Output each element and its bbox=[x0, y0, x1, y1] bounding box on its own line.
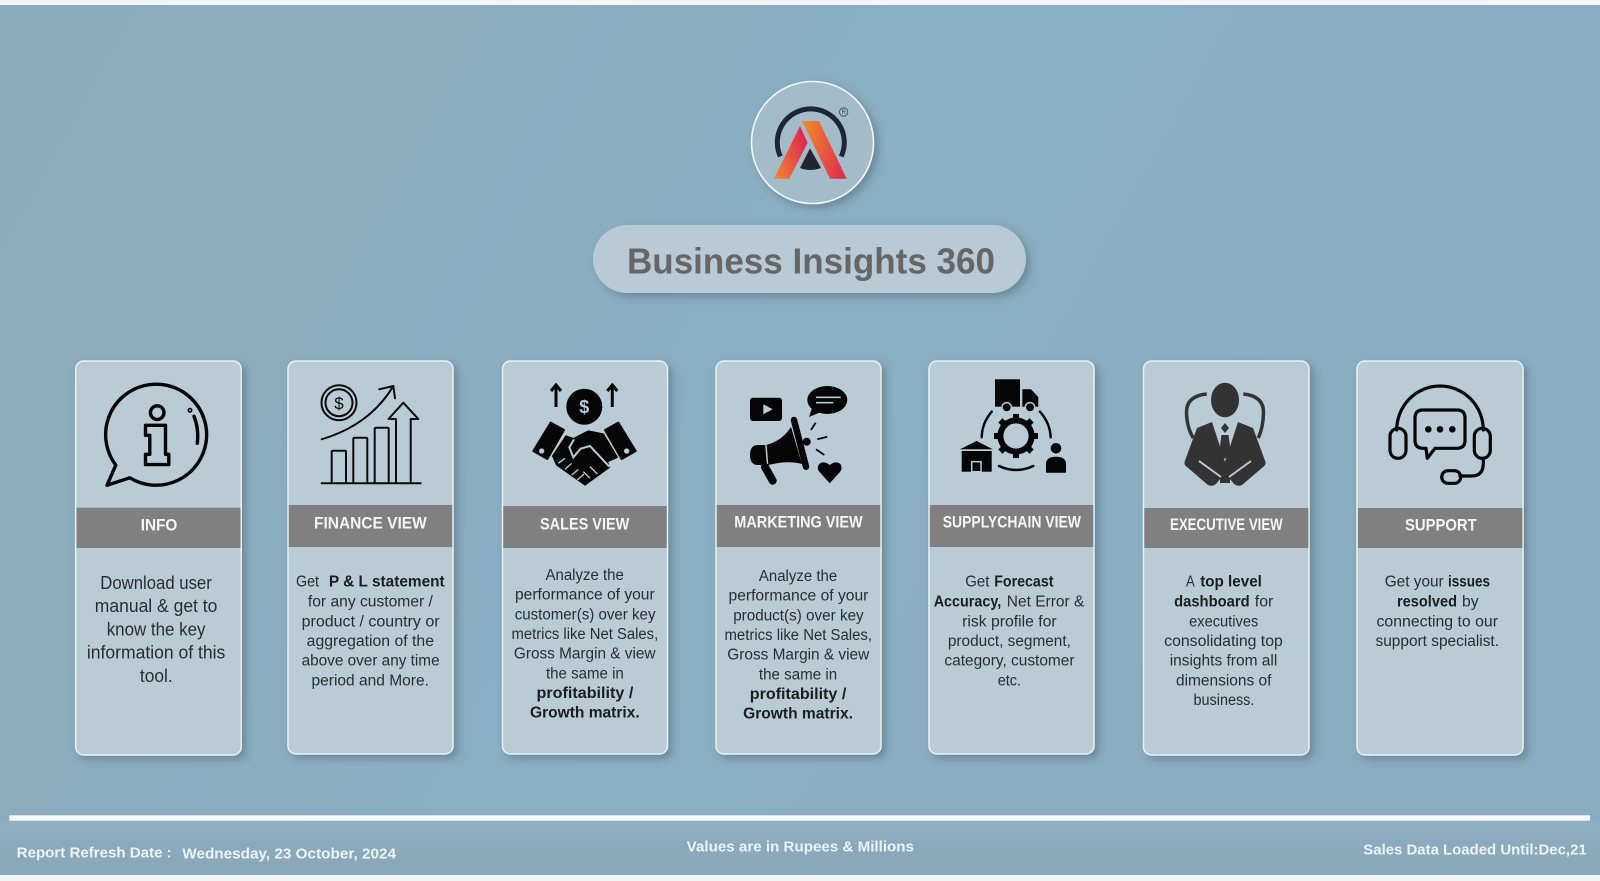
text: sales description: Gross Margin & view bbox=[514, 646, 656, 663]
heading: marketing view: MARKETING VIEW bbox=[734, 513, 863, 531]
text: sales description: Analyze the bbox=[546, 567, 624, 584]
text: executive description bbox=[1164, 574, 1283, 709]
title pill: Business Insights 360 bbox=[627, 240, 995, 282]
text: support description bbox=[1376, 574, 1499, 650]
logo badge bbox=[752, 82, 874, 204]
text: executive description: business. bbox=[1194, 692, 1254, 709]
text: marketing description bbox=[724, 568, 872, 723]
text: supplychain description: Forecast bbox=[994, 574, 1054, 591]
heading: info bbox=[76, 508, 240, 548]
heading: finance view bbox=[289, 505, 452, 547]
footer: units note: Values are in Rupees & Millions bbox=[687, 839, 914, 856]
text: executive description: executives bbox=[1189, 613, 1259, 630]
footer: report refresh date label: Report Refresh Date : bbox=[17, 844, 172, 861]
heading: support: SUPPORT bbox=[1405, 517, 1477, 535]
panel: info bbox=[76, 361, 241, 755]
text: sales description: the same in bbox=[546, 665, 624, 682]
text: supplychain description: product, segment, bbox=[948, 633, 1071, 650]
text: executive description: A bbox=[1186, 574, 1195, 591]
text: support description: resolved bbox=[1397, 594, 1457, 610]
text: supplychain description bbox=[934, 574, 1085, 689]
heading: executive view bbox=[1144, 508, 1308, 548]
text: finance description: for any customer / bbox=[308, 594, 434, 610]
text: marketing description: Analyze the bbox=[759, 568, 837, 585]
text: info description: tool. bbox=[140, 666, 173, 686]
text: sales description: Growth matrix. bbox=[530, 705, 640, 722]
heading: marketing view bbox=[717, 505, 880, 547]
icon: finance growth chart bbox=[322, 385, 421, 483]
text: sales description: metrics like Net Sales, bbox=[512, 626, 658, 643]
heading: sales view: SALES VIEW bbox=[540, 515, 630, 533]
heading: executive view: EXECUTIVE VIEW bbox=[1170, 516, 1283, 534]
icon: info speech bubble bbox=[106, 384, 207, 485]
text: sales description bbox=[512, 567, 658, 722]
icon: finance growth chart: $ bbox=[334, 394, 344, 413]
text: finance description: P & L statement bbox=[329, 574, 445, 591]
panel: finance view bbox=[288, 361, 453, 754]
text: support description: issues bbox=[1448, 574, 1490, 591]
icon: marketing megaphone bbox=[750, 386, 847, 483]
heading: info: INFO bbox=[141, 517, 177, 535]
text: marketing description: Growth matrix. bbox=[743, 706, 853, 723]
text: support description: by bbox=[1462, 594, 1479, 610]
text: info description: manual & get to bbox=[95, 596, 217, 616]
text: finance description bbox=[296, 574, 445, 689]
text: marketing description: performance of your bbox=[728, 588, 868, 605]
text: supplychain description: Accuracy, bbox=[934, 594, 1001, 610]
text: info description: Download user bbox=[100, 573, 212, 593]
text: info description: know the key bbox=[107, 620, 206, 640]
text: supplychain description: Net Error & bbox=[1007, 594, 1085, 610]
icon: sales handshake with coin bbox=[533, 385, 636, 485]
text: support description: Get your bbox=[1385, 574, 1444, 591]
text: finance description: above over any time bbox=[302, 653, 440, 670]
icon: sales handshake with coin: $ bbox=[579, 397, 589, 417]
text: support description: connecting to our bbox=[1376, 613, 1498, 630]
text: finance description: aggregation of the bbox=[307, 633, 434, 650]
panel: support bbox=[1357, 361, 1523, 755]
text: marketing description: the same in bbox=[759, 666, 837, 683]
text: finance description: product / country or bbox=[302, 613, 440, 630]
text: executive description: consolidating top bbox=[1164, 633, 1283, 650]
text: info description bbox=[87, 573, 225, 686]
text: finance description: Get bbox=[296, 574, 320, 591]
text: marketing description: profitability / bbox=[750, 686, 847, 703]
heading: sales view bbox=[503, 506, 667, 548]
icon: support headset bbox=[1390, 386, 1490, 483]
text: supplychain description: category, customer bbox=[944, 653, 1074, 670]
panel: supplychain view bbox=[929, 361, 1094, 754]
panel: marketing view bbox=[716, 361, 881, 754]
heading: finance view: FINANCE VIEW bbox=[314, 514, 427, 532]
text: executive description: for bbox=[1255, 594, 1273, 610]
text: executive description: insights from all bbox=[1170, 653, 1277, 670]
text: sales description: profitability / bbox=[536, 685, 634, 702]
text: supplychain description: Get bbox=[965, 574, 990, 591]
text: info description: information of this bbox=[87, 643, 225, 663]
text: supplychain description: etc. bbox=[998, 672, 1021, 689]
footer: report refresh date value: Wednesday, 23 October, 2024 bbox=[182, 846, 397, 863]
text: supplychain description: risk profile for bbox=[962, 613, 1057, 630]
icon: supply chain gear and truck bbox=[960, 379, 1066, 473]
text: marketing description: metrics like Net Sales, bbox=[724, 627, 872, 644]
logo badge: R bbox=[842, 110, 847, 116]
panel: executive view bbox=[1144, 361, 1309, 755]
panel: sales view bbox=[502, 361, 668, 754]
icon: executive in suit bbox=[1184, 383, 1266, 486]
heading: supplychain view: SUPPLYCHAIN VIEW bbox=[943, 513, 1081, 531]
text: sales description: performance of your bbox=[515, 587, 655, 604]
text: executive description: dimensions of bbox=[1176, 672, 1272, 689]
heading: supplychain view bbox=[930, 505, 1093, 547]
text: sales description: customer(s) over key bbox=[515, 606, 656, 623]
heading: support bbox=[1358, 508, 1522, 548]
text: finance description: period and More. bbox=[312, 672, 429, 689]
text: marketing description: Gross Margin & view bbox=[727, 647, 870, 664]
footer: sales data loaded note: Sales Data Loaded Until:Dec,21 bbox=[1363, 842, 1587, 859]
title pill bbox=[593, 225, 1026, 293]
text: executive description: dashboard bbox=[1174, 594, 1250, 610]
text: marketing description: product(s) over key bbox=[733, 607, 864, 624]
text: executive description: top level bbox=[1200, 574, 1262, 591]
text: support description: support specialist. bbox=[1376, 633, 1499, 650]
